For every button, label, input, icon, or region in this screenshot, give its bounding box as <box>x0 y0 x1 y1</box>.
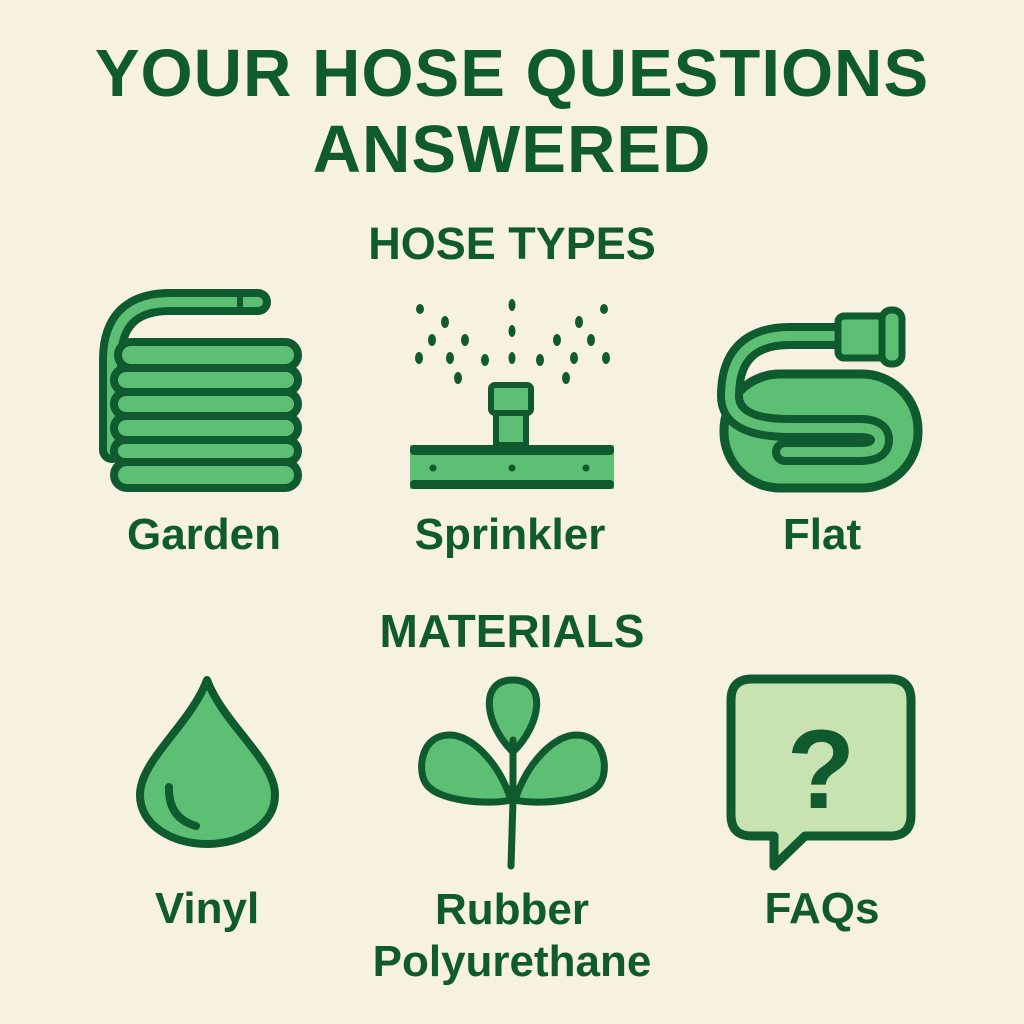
label: sprinkler: Sprinkler <box>415 510 605 559</box>
label: vinyl: Vinyl <box>155 884 259 933</box>
icon: water drop <box>140 680 275 844</box>
label: flat: Flat <box>783 510 861 559</box>
heading: materials: MATERIALS <box>380 605 644 657</box>
heading: hose types: HOSE TYPES <box>368 218 656 269</box>
icon: faq speech bubble <box>731 679 911 866</box>
icon: faq speech bubble: ? <box>787 707 855 832</box>
label: faqs: FAQs <box>765 884 879 933</box>
label: rubber polyurethane <box>373 885 651 986</box>
label: rubber polyurethane: Rubber <box>435 885 589 934</box>
icon: garden hose <box>112 292 298 488</box>
title <box>95 36 929 187</box>
title: ANSWERED <box>313 112 711 187</box>
title: YOUR HOSE QUESTIONS <box>95 36 929 111</box>
label: garden: Garden <box>127 510 281 559</box>
label: rubber polyurethane: Polyurethane <box>373 937 651 986</box>
icon: flat hose <box>724 310 918 488</box>
icon: leaf sprig <box>422 680 604 866</box>
icon: sprinkler <box>410 299 614 489</box>
